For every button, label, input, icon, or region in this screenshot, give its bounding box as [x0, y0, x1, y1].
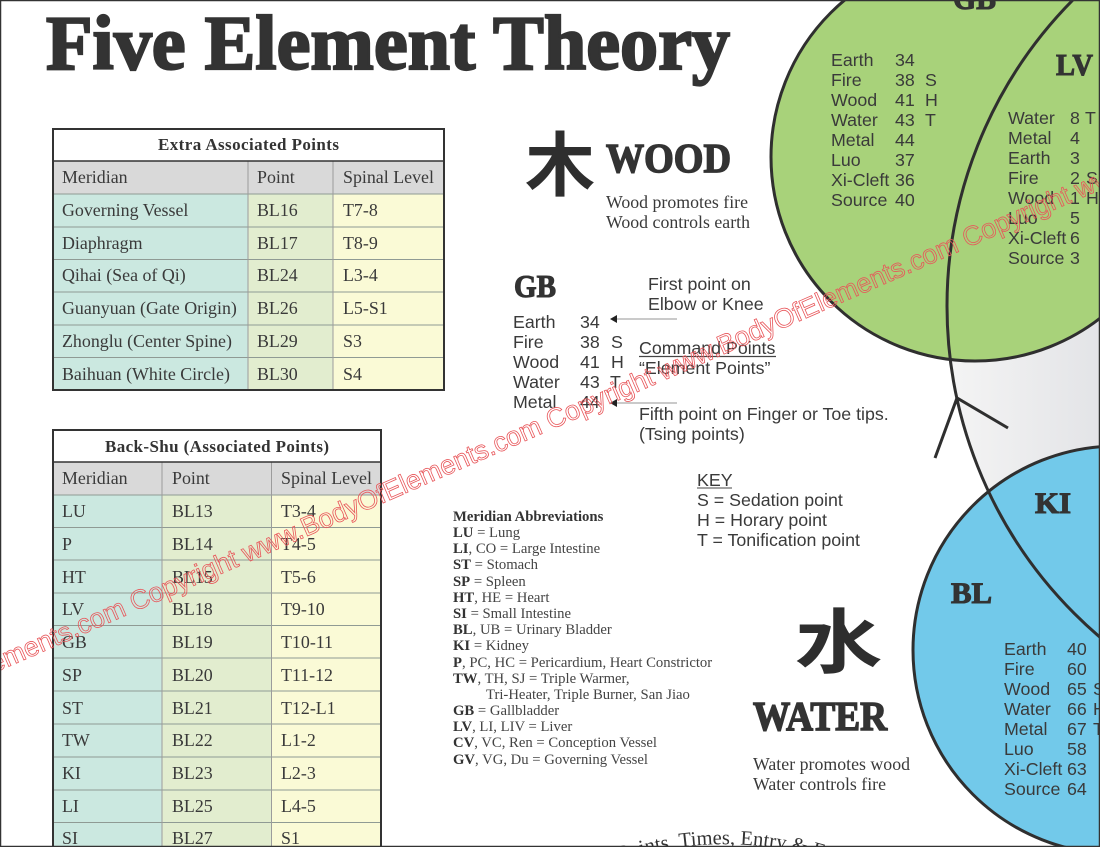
- label group: LV meridian points: Earth: [1008, 148, 1050, 168]
- label group: BL meridian points: 66: [1067, 699, 1087, 719]
- meridian abbreviations: ST = Stomach: [453, 557, 539, 573]
- label group: GB meridian points: 41: [895, 90, 915, 110]
- label group: BL meridian points: 67: [1067, 719, 1087, 739]
- table: extra associated points: BL17: [257, 233, 298, 253]
- table: back-shu associated points: BL23: [172, 763, 213, 783]
- label group: GB meridian points: Source: [831, 190, 887, 210]
- callout: first point: [648, 274, 764, 314]
- legend: GB command point example: 38: [580, 332, 600, 352]
- meridian abbreviations: P, PC, HC = Pericardium, Heart Constrictor: [453, 655, 712, 671]
- label group: LV meridian points: 6: [1070, 228, 1080, 248]
- meridian abbreviations: Tri-Heater, Triple Burner, San Jiao: [486, 687, 690, 703]
- label group: BL meridian points: BL: [951, 577, 992, 610]
- legend: GB command point example: Fire: [513, 332, 544, 352]
- meridian abbreviations: KI = Kidney: [453, 638, 530, 654]
- text: water relations: [753, 754, 910, 794]
- table: back-shu associated points: Spinal Level: [281, 468, 372, 488]
- label: KI: KI: [1035, 487, 1071, 520]
- callout: command points: [639, 338, 776, 378]
- arrow: fifth point: [610, 399, 677, 407]
- meridian abbreviations: LV, LI, LIV = Liver: [453, 719, 572, 735]
- label group: LV meridian points: Metal: [1008, 128, 1051, 148]
- text: wood relations: Wood promotes fire: [606, 192, 748, 212]
- label group: GB meridian points: [831, 0, 996, 210]
- label group: LV meridian points: Source: [1008, 248, 1064, 268]
- label group: BL meridian points: 60: [1067, 659, 1087, 679]
- title: Five Element Theory: [46, 0, 730, 86]
- meridian abbreviations: BL, UB = Urinary Bladder: [453, 622, 612, 638]
- table: extra associated points: Baihuan (White Circle): [62, 364, 230, 385]
- table: back-shu associated points: BL13: [172, 501, 213, 521]
- meridian abbreviations: TW, TH, SJ = Triple Warmer,: [453, 671, 630, 687]
- label group: GB meridian points: Metal: [831, 130, 874, 150]
- key: T = Tonification point: [697, 530, 860, 550]
- legend: GB command point example: 44: [580, 392, 600, 412]
- table: extra associated points: BL26: [257, 298, 298, 318]
- table: back-shu associated points: HT: [62, 567, 86, 587]
- label group: BL meridian points: 65: [1067, 679, 1087, 699]
- label group: LV meridian points: Fire: [1008, 168, 1039, 188]
- circle: wood element: [771, 0, 1100, 361]
- label group: GB meridian points: 34: [895, 50, 915, 70]
- table: extra associated points: Meridian: [62, 167, 128, 187]
- arrow: first point: [610, 315, 677, 323]
- label group: BL meridian points: 40: [1067, 639, 1087, 659]
- text: wood relations: Wood controls earth: [606, 212, 750, 232]
- label group: LV meridian points: Wood: [1008, 188, 1054, 208]
- text: water relations: Water controls fire: [753, 774, 886, 794]
- callout: first point: Elbow or Knee: [648, 294, 764, 314]
- table: extra associated points: BL24: [257, 265, 298, 285]
- legend: GB command point example: Water: [513, 372, 560, 392]
- table: extra associated points: Point: [257, 167, 295, 187]
- label group: LV meridian points: 8: [1070, 108, 1080, 128]
- label group: BL meridian points: Luo: [1004, 739, 1034, 759]
- table: extra associated points: T8-9: [343, 233, 378, 253]
- table: back-shu associated points: BL25: [172, 796, 213, 816]
- table: back-shu associated points: BL14: [172, 534, 213, 554]
- callout: fifth point: [639, 404, 889, 444]
- table: back-shu associated points: BL21: [172, 698, 213, 718]
- label group: GB meridian points: Wood: [831, 90, 877, 110]
- label group: BL meridian points: Wood: [1004, 679, 1050, 699]
- table: back-shu associated points: GB: [62, 632, 87, 652]
- table: back-shu associated points: BL22: [172, 730, 213, 750]
- table: back-shu associated points: BL15: [172, 567, 213, 587]
- legend: GB command point example: Earth: [513, 312, 556, 332]
- legend: GB command point example: T: [610, 372, 621, 392]
- table: extra associated points: BL16: [257, 200, 298, 220]
- label group: LV meridian points: H: [1086, 188, 1099, 208]
- label group: BL meridian points: Fire: [1004, 659, 1035, 679]
- legend: GB command point example: Wood: [513, 352, 559, 372]
- label group: LV meridian points: 4: [1070, 128, 1080, 148]
- meridian abbreviations: GV, VG, Du = Governing Vessel: [453, 752, 648, 768]
- meridian abbreviations: LU = Lung: [453, 525, 521, 541]
- table: back-shu associated points: Point: [172, 468, 210, 488]
- central ring with gray interior: [952, 321, 1099, 489]
- label group: GB meridian points: T: [925, 110, 936, 130]
- label group: GB meridian points: 36: [895, 170, 915, 190]
- label group: GB meridian points: 40: [895, 190, 915, 210]
- heading: wood: WOOD: [606, 135, 731, 181]
- label group: LV meridian points: 3: [1070, 248, 1080, 268]
- label group: BL meridian points: 58: [1067, 739, 1087, 759]
- label group: GB meridian points: S: [925, 70, 937, 90]
- label group: BL meridian points: Earth: [1004, 639, 1046, 659]
- table: back-shu associated points: T9-10: [281, 599, 325, 619]
- table: extra associated points: L3-4: [343, 265, 378, 285]
- table: extra associated points: Zhonglu (Center Spine): [62, 331, 232, 352]
- label group: LV meridian points: 1: [1070, 188, 1080, 208]
- label group: LV meridian points: Xi-Cleft: [1008, 228, 1066, 248]
- table: back-shu associated points: LV: [62, 599, 84, 619]
- table: extra associated points: S3: [343, 331, 362, 351]
- table: extra associated points: L5-S1: [343, 298, 388, 318]
- table: back-shu associated points: T5-6: [281, 567, 316, 587]
- key: H = Horary point: [697, 510, 827, 530]
- table: back-shu associated points: T4-5: [281, 534, 316, 554]
- ring outline: [946, 1, 1099, 638]
- legend: GB command point example: S: [611, 332, 623, 352]
- table: extra associated points: BL30: [257, 364, 298, 384]
- callout: command points: Command Points: [639, 338, 775, 358]
- label group: GB meridian points: Luo: [831, 150, 861, 170]
- label group: GB meridian points: H: [925, 90, 938, 110]
- table: back-shu associated points: L2-3: [281, 763, 316, 783]
- legend: GB command point example: H: [611, 352, 624, 372]
- label group: BL meridian points: 63: [1067, 759, 1087, 779]
- table: extra associated points: BL29: [257, 331, 298, 351]
- text: water relations: Water promotes wood: [753, 754, 910, 774]
- label group: LV meridian points: 3: [1070, 148, 1080, 168]
- label group: LV meridian points: Luo: [1008, 208, 1038, 228]
- legend: GB command point example: GB: [514, 268, 556, 304]
- table: back-shu associated points: LI: [62, 796, 79, 816]
- table: back-shu associated points: BL20: [172, 665, 213, 685]
- legend: GB command point example: [513, 268, 624, 412]
- table: back-shu associated points: Meridian: [62, 468, 128, 488]
- table: back-shu associated points: [53, 430, 381, 847]
- label group: BL meridian points: 64: [1067, 779, 1087, 799]
- table: back-shu associated points: KI: [62, 763, 81, 783]
- table: back-shu associated points: Back-Shu (Associated Points): [105, 437, 329, 456]
- arrow: wood feeds into ring: [935, 398, 1008, 458]
- callout: fifth point: Fifth point on Finger or Toe tips.: [639, 404, 889, 424]
- text: wood relations: [606, 192, 750, 232]
- label group: GB meridian points: Fire: [831, 70, 862, 90]
- table: extra associated points: Diaphragm: [62, 233, 143, 253]
- meridian abbreviations: LI, CO = Large Intestine: [453, 541, 601, 557]
- meridian abbreviations: Meridian Abbreviations: [453, 509, 604, 525]
- meridian abbreviations: CV, VC, Ren = Conception Vessel: [453, 735, 657, 751]
- label group: LV meridian points: 5: [1070, 208, 1080, 228]
- label group: LV meridian points: S: [1086, 168, 1098, 188]
- table: back-shu associated points: T3-4: [281, 501, 316, 521]
- key: [697, 470, 860, 550]
- table: extra associated points: Qihai (Sea of Qi): [62, 265, 186, 286]
- label group: BL meridian points: Source: [1004, 779, 1060, 799]
- legend: GB command point example: 41: [580, 352, 600, 372]
- meridian abbreviations: SP = Spleen: [453, 574, 526, 590]
- legend: GB command point example: Metal: [513, 392, 556, 412]
- table: extra associated points: Governing Vessel: [62, 200, 188, 220]
- table: back-shu associated points: TW: [62, 730, 90, 750]
- table: extra associated points: Guanyuan (Gate Origin): [62, 298, 237, 319]
- table: back-shu associated points: T12-L1: [281, 698, 336, 718]
- table: extra associated points: T7-8: [343, 200, 378, 220]
- meridian abbreviations: [453, 509, 712, 768]
- label group: BL meridian points: [951, 577, 1100, 799]
- circle: water element: [913, 446, 1100, 847]
- table: extra associated points: [53, 129, 444, 390]
- label group: LV meridian points: Water: [1008, 108, 1055, 128]
- icon: wood character: 木: [525, 110, 595, 211]
- table: back-shu associated points: SP: [62, 665, 82, 685]
- label group: LV meridian points: [1008, 47, 1099, 268]
- label group: GB meridian points: Water: [831, 110, 878, 130]
- icon: water character: 水: [795, 586, 882, 687]
- label group: LV meridian points: 2: [1070, 168, 1080, 188]
- callout: command points: “Element Points”: [639, 358, 771, 378]
- label group: LV meridian points: LV: [1056, 47, 1094, 82]
- table: back-shu associated points: L4-5: [281, 796, 316, 816]
- table: extra associated points: Extra Associated Points: [158, 135, 339, 154]
- label group: BL meridian points: Xi-Cleft: [1004, 759, 1062, 779]
- table: back-shu associated points: BL19: [172, 632, 213, 652]
- label group: LV meridian points: T: [1085, 108, 1096, 128]
- label group: GB meridian points: 38: [895, 70, 915, 90]
- table: back-shu associated points: L1-2: [281, 730, 316, 750]
- table: extra associated points: Spinal Level: [343, 167, 434, 187]
- table: back-shu associated points: P: [62, 534, 72, 554]
- table: back-shu associated points: T11-12: [281, 665, 333, 685]
- label group: BL meridian points: Water: [1004, 699, 1051, 719]
- table: back-shu associated points: ST: [62, 698, 83, 718]
- key: S = Sedation point: [697, 490, 843, 510]
- label group: GB meridian points: 43: [895, 110, 915, 130]
- callout: fifth point: (Tsing points): [639, 424, 745, 444]
- diagram: element circles: [771, 0, 1100, 847]
- heading: water: WATER: [753, 693, 887, 739]
- legend: GB command point example: 43: [580, 372, 600, 392]
- key: KEY: [697, 470, 733, 490]
- table: extra associated points: S4: [343, 364, 362, 384]
- meridian abbreviations: SI = Small Intestine: [453, 606, 572, 622]
- meridian abbreviations: GB = Gallbladder: [453, 703, 559, 719]
- label group: GB meridian points: Xi-Cleft: [831, 170, 889, 190]
- table: back-shu associated points: LU: [62, 501, 86, 521]
- table: back-shu associated points: BL18: [172, 599, 213, 619]
- table: back-shu associated points: T10-11: [281, 632, 333, 652]
- label group: BL meridian points: Metal: [1004, 719, 1047, 739]
- callout: first point: First point on: [648, 274, 751, 294]
- meridian abbreviations: HT, HE = Heart: [453, 590, 549, 606]
- label group: GB meridian points: Earth: [831, 50, 874, 70]
- legend: GB command point example: 34: [580, 312, 600, 332]
- label group: GB meridian points: 37: [895, 150, 915, 170]
- label group: GB meridian points: 44: [895, 130, 915, 150]
